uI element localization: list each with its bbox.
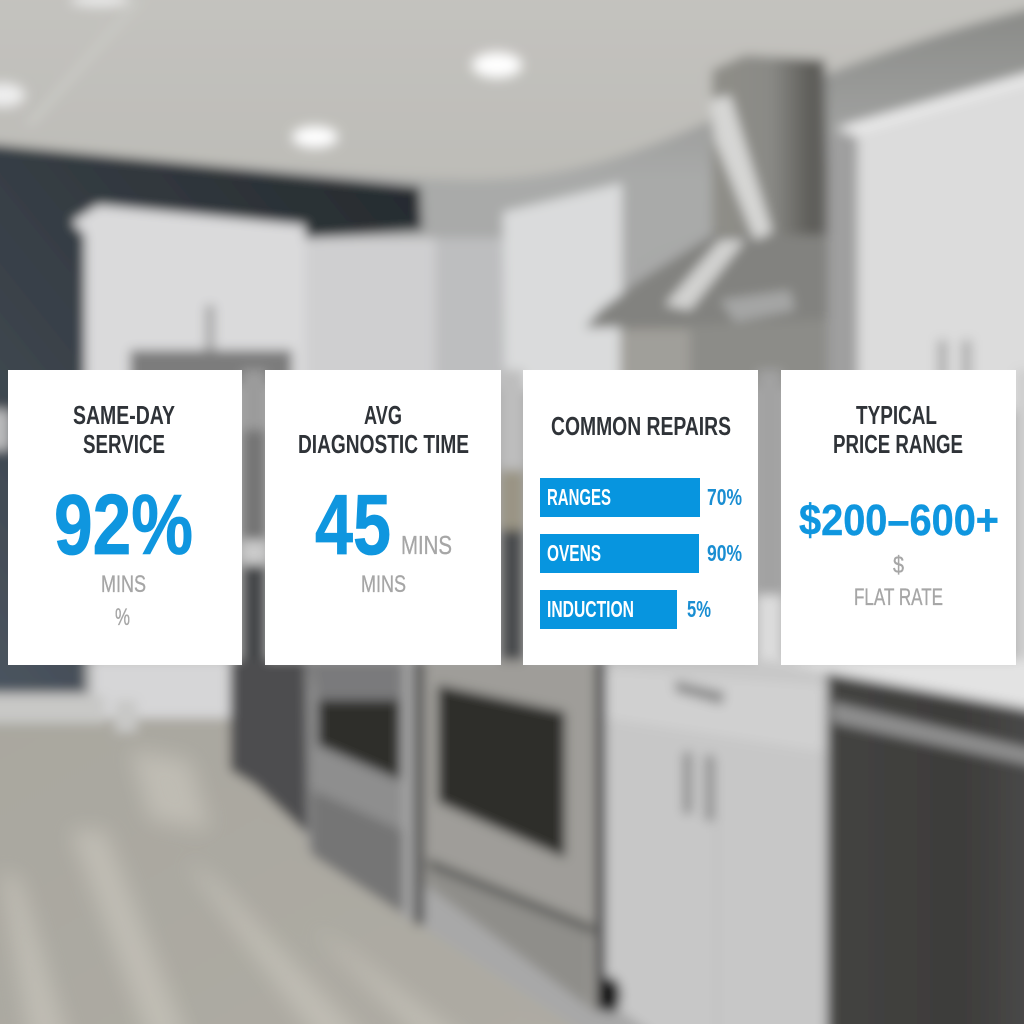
dark navy wall: [0, 143, 422, 692]
heading: same-day service: SERVICE: [83, 429, 165, 459]
heading: avg diagnostic time: DIAGNOSTIC TIME: [298, 429, 469, 459]
backsplash: [620, 318, 852, 388]
bar: ranges 70%: 70%: [707, 484, 742, 510]
bar: induction 5%: [540, 590, 711, 629]
lower left cabinet: [92, 660, 230, 718]
ceiling lights: [0, 0, 522, 148]
stat: 45: 45: [315, 478, 391, 573]
bar: ovens 90%: 90%: [707, 540, 742, 566]
unit label: percent: %: [115, 604, 130, 631]
hood highlight slit: [710, 95, 772, 240]
range right: [424, 660, 598, 1015]
bar: induction 5%: 5%: [687, 596, 711, 622]
unit label: flat rate: FLAT RATE: [854, 584, 943, 611]
bar: ovens 90%: [540, 534, 742, 573]
microwave strip: [130, 350, 292, 385]
stat unit: mins: MINS: [401, 530, 452, 560]
heading: same-day service: SAME-DAY: [73, 400, 175, 430]
ceiling panel seam: [24, 0, 144, 125]
heading: same-day service: [73, 400, 175, 459]
unit label: mins: MINS: [361, 571, 406, 598]
bar: ranges 70%: [540, 478, 742, 517]
unit label: mins: MINS: [101, 571, 146, 598]
countertop: [770, 660, 1024, 710]
heading: typical price range: TYPICAL: [856, 400, 937, 430]
dark lower cabinet: [230, 660, 308, 835]
unit label: dollar: $: [893, 552, 904, 579]
bar: ranges 70%: RANGES: [547, 484, 611, 510]
cabinet kick shadow: [599, 977, 621, 1013]
heading: avg diagnostic time: AVG: [364, 400, 402, 430]
stat: price range: $200–600+: [799, 496, 999, 545]
panel: common repairs: [523, 370, 758, 665]
heading: typical price range: [833, 400, 963, 459]
range hood canopy: [585, 235, 850, 328]
upper cabinet center: [503, 183, 622, 390]
upper cabinet right: [836, 68, 1024, 410]
panel: typical price range: [781, 370, 1016, 665]
range hood chimney: [712, 55, 830, 240]
panel: avg diagnostic time: [265, 370, 501, 665]
heading: avg diagnostic time: [298, 400, 469, 459]
heading: typical price range: PRICE RANGE: [833, 429, 963, 459]
panel: same-day service: [8, 370, 242, 665]
floor: [0, 700, 600, 1024]
dishwasher: [828, 674, 1024, 1024]
heading: common repairs: COMMON REPAIRS: [551, 411, 731, 441]
back wall right: [400, 0, 1024, 400]
bar: induction 5%: INDUCTION: [547, 596, 634, 622]
base cabinet: [606, 660, 825, 1024]
gap strips behind cards: [242, 370, 266, 430]
bar: ovens 90%: OVENS: [547, 540, 601, 566]
stat: 92%: 92%: [54, 478, 193, 573]
floor plank streaks: [0, 750, 470, 1024]
range left: [306, 660, 420, 925]
upper cabinets left: [72, 205, 305, 385]
ceiling: [0, 0, 1024, 180]
